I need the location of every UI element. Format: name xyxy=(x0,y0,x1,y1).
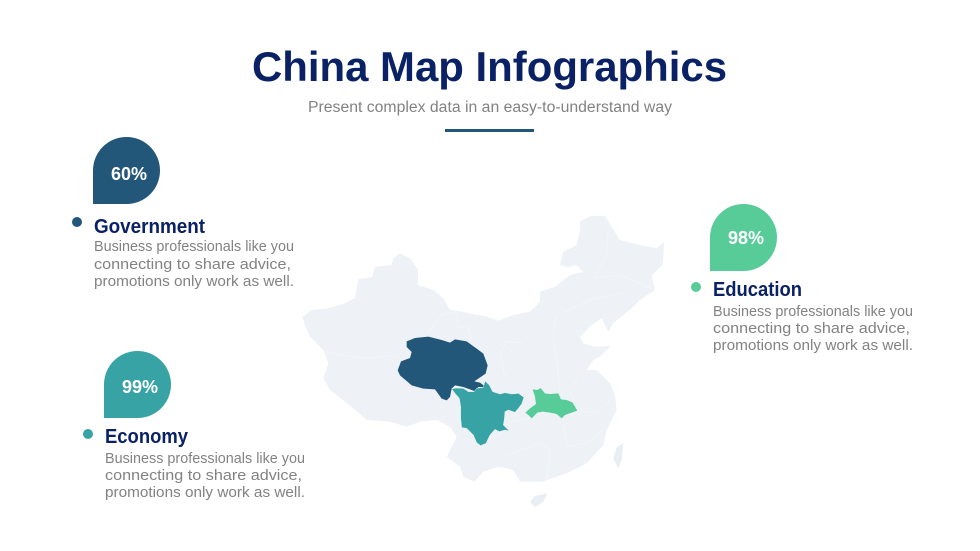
map: Qinghai highlighted xyxy=(398,337,488,400)
government percentage drop xyxy=(93,137,160,204)
map: Sichuan highlighted xyxy=(452,381,524,446)
economy description: Business professionals like you xyxy=(105,450,305,467)
map: Taiwan xyxy=(613,443,623,468)
education bullet xyxy=(691,282,701,292)
government heading: Government xyxy=(94,216,205,238)
map: Hubei highlighted xyxy=(525,388,577,418)
map: mainland base xyxy=(302,216,664,482)
government description xyxy=(94,238,294,290)
china map xyxy=(302,216,664,507)
map: Hainan xyxy=(530,493,547,507)
panel: economy xyxy=(83,351,305,501)
economy percentage drop xyxy=(104,351,171,418)
economy description xyxy=(105,450,305,501)
subtitle: Present complex data in an easy-to-understand way xyxy=(308,99,672,116)
government description: connecting to share advice, xyxy=(94,256,291,273)
government bullet xyxy=(72,217,82,227)
education description xyxy=(713,303,913,354)
government description: Business professionals like you xyxy=(94,238,294,255)
economy heading: Economy xyxy=(105,426,189,448)
economy bullet xyxy=(83,429,93,439)
education percentage drop xyxy=(710,204,777,271)
education percentage drop: 98% xyxy=(728,228,764,248)
education heading: Education xyxy=(713,279,802,301)
panel: education xyxy=(691,204,913,354)
title: China Map Infographics xyxy=(252,43,727,90)
education description: Business professionals like you xyxy=(713,303,913,320)
panel: government xyxy=(72,137,294,290)
government description: promotions only work as well. xyxy=(94,273,294,290)
map: provincial borders xyxy=(325,230,655,480)
economy percentage drop: 99% xyxy=(122,377,158,397)
education description: promotions only work as well. xyxy=(713,337,913,354)
economy description: promotions only work as well. xyxy=(105,484,305,501)
economy description: connecting to share advice, xyxy=(105,467,302,484)
government percentage drop: 60% xyxy=(111,164,147,184)
education description: connecting to share advice, xyxy=(713,320,910,337)
title underline xyxy=(445,129,534,132)
